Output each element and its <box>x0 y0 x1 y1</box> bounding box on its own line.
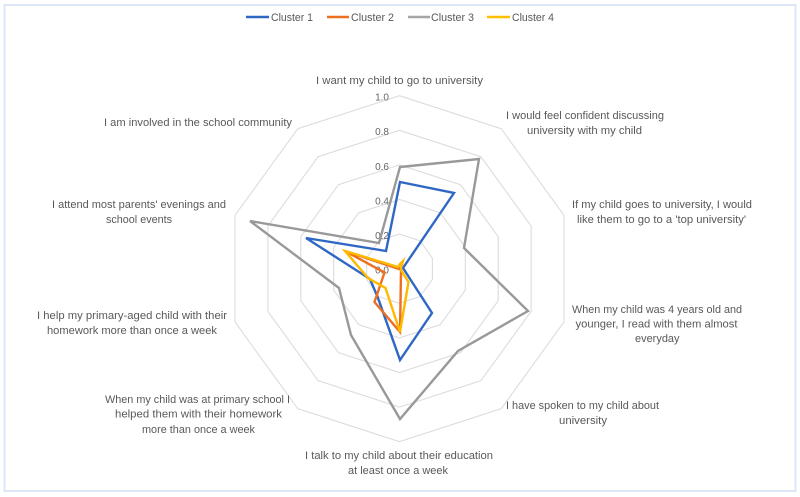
series: Cluster 3 <box>250 159 528 419</box>
axis tick labels: 1.0 <box>375 92 389 104</box>
axis label: spoken about university: university <box>559 415 607 427</box>
axis tick labels: 0.2 <box>375 231 389 242</box>
axis tick labels <box>375 92 389 276</box>
legend: Cluster 3 <box>431 12 474 24</box>
axis label: read when 4 years old: When my child was 4 years old and <box>572 304 742 316</box>
axis label: read when 4 years old: younger, I read with them almost <box>576 318 738 330</box>
axis label: read when 4 years old: everyday <box>635 333 680 345</box>
axis tick labels: 0.8 <box>375 127 389 138</box>
series: Cluster 4 <box>345 251 408 332</box>
axis label: primary-aged homework <box>37 310 227 337</box>
axis label: confident discussing: university with my child <box>527 125 642 137</box>
axis label: parents' evenings: I attend most parents' evenings and <box>52 199 226 211</box>
axis label: parents' evenings: school events <box>106 214 172 226</box>
series: Cluster 2 <box>345 251 401 332</box>
legend <box>246 12 554 24</box>
legend: Cluster 2 <box>351 12 394 24</box>
axis tick labels: 0.0 <box>375 266 389 276</box>
axis label: spoken about university: I have spoken to my child about <box>506 400 660 412</box>
axis label: go to university: I want my child to go to university <box>316 75 483 87</box>
axis label: top university: like them to go to a 'top university' <box>577 214 746 226</box>
radar grid <box>235 96 564 442</box>
axis label: primary school homework: more than once a week <box>142 424 255 436</box>
axis label: primary-aged homework: I help my primary-aged child with their <box>37 310 227 322</box>
axis label: primary school homework: helped them with their homework <box>115 408 282 420</box>
axis label: primary school homework <box>105 394 290 436</box>
axis label: spoken about university <box>506 400 660 427</box>
axis label: talk about education: at least once a week <box>348 465 448 477</box>
series: Cluster 1 <box>306 182 454 360</box>
axis tick labels: 0.6 <box>375 162 389 173</box>
axis label: confident discussing: I would feel confident discussing <box>506 110 664 122</box>
axis label: top university: If my child goes to university, I would <box>572 199 752 211</box>
legend: Cluster 1 <box>271 12 313 24</box>
axis label: confident discussing <box>506 110 664 137</box>
axis label: primary-aged homework: homework more than once a week <box>47 325 217 337</box>
legend: Cluster 4 <box>512 12 554 24</box>
axis label: primary school homework: When my child was at primary school I <box>105 394 290 406</box>
axis tick labels: 0.4 <box>375 196 389 208</box>
axis label: talk about education <box>305 450 493 477</box>
axis label: top university <box>572 199 752 226</box>
axis label: school community: I am involved in the school community <box>104 117 292 129</box>
axis label: read when 4 years old <box>572 304 742 345</box>
axis label: talk about education: I talk to my child about their education <box>305 450 493 462</box>
axis label: parents' evenings <box>52 199 226 226</box>
